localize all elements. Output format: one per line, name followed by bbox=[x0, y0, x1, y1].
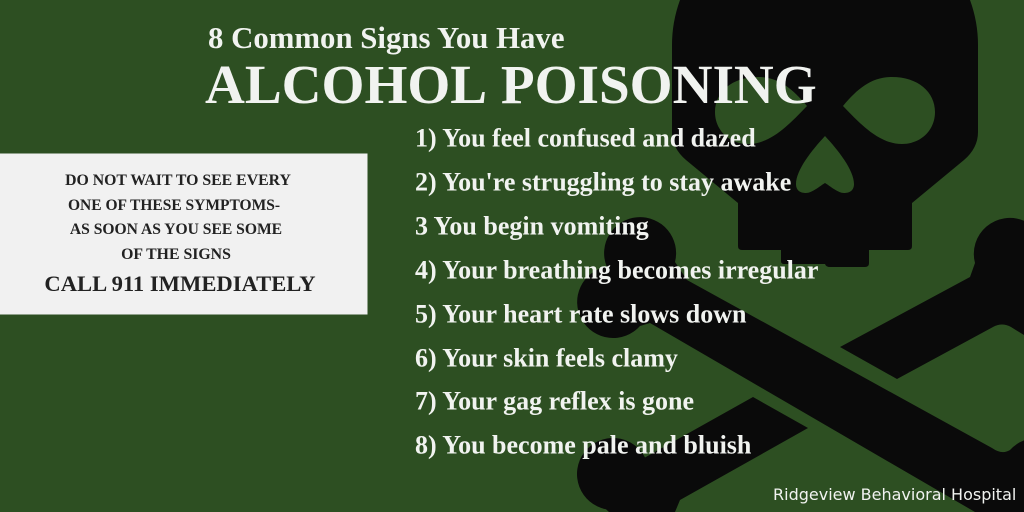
panel: warning callout bbox=[0, 154, 368, 314]
icon: skull and crossbones bbox=[577, 0, 1024, 512]
sign 2: 2) You're struggling to stay awake bbox=[415, 168, 791, 196]
warning line 4: OF THE SIGNS bbox=[121, 246, 231, 263]
panel background bbox=[0, 154, 368, 314]
call to action: CALL 911 IMMEDIATELY bbox=[44, 271, 316, 296]
heading line: subtitle: 8 Common Signs You Have bbox=[208, 21, 564, 55]
bone: upper left to lower right bbox=[577, 217, 1024, 512]
sign 7: 7) Your gag reflex is gone bbox=[415, 386, 694, 416]
warning line 3: AS SOON AS YOU SEE SOME bbox=[70, 221, 282, 238]
sign 4: 4) Your breathing becomes irregular bbox=[415, 256, 818, 284]
footer: hospital name: Ridgeview Behavioral Hospital bbox=[773, 485, 1016, 504]
sign 6: 6) Your skin feels clamy bbox=[415, 344, 678, 372]
sign 3: 3 You begin vomiting bbox=[415, 212, 649, 240]
skull bbox=[672, 0, 978, 267]
sign 8: 8) You become pale and bluish bbox=[415, 430, 752, 460]
list of signs bbox=[415, 124, 818, 460]
sign 5: 5) Your heart rate slows down bbox=[415, 300, 747, 328]
warning text bbox=[65, 172, 291, 263]
warning line 1: DO NOT WAIT TO SEE EVERY bbox=[65, 172, 291, 189]
heading line: main title: ALCOHOL POISONING bbox=[205, 54, 817, 115]
sign 1: 1) You feel confused and dazed bbox=[415, 124, 756, 152]
bone: upper right fragment bbox=[840, 218, 1024, 379]
heading bbox=[205, 21, 817, 115]
bone: lower left fragment bbox=[577, 397, 808, 512]
warning line 2: ONE OF THESE SYMPTOMS- bbox=[68, 197, 280, 214]
